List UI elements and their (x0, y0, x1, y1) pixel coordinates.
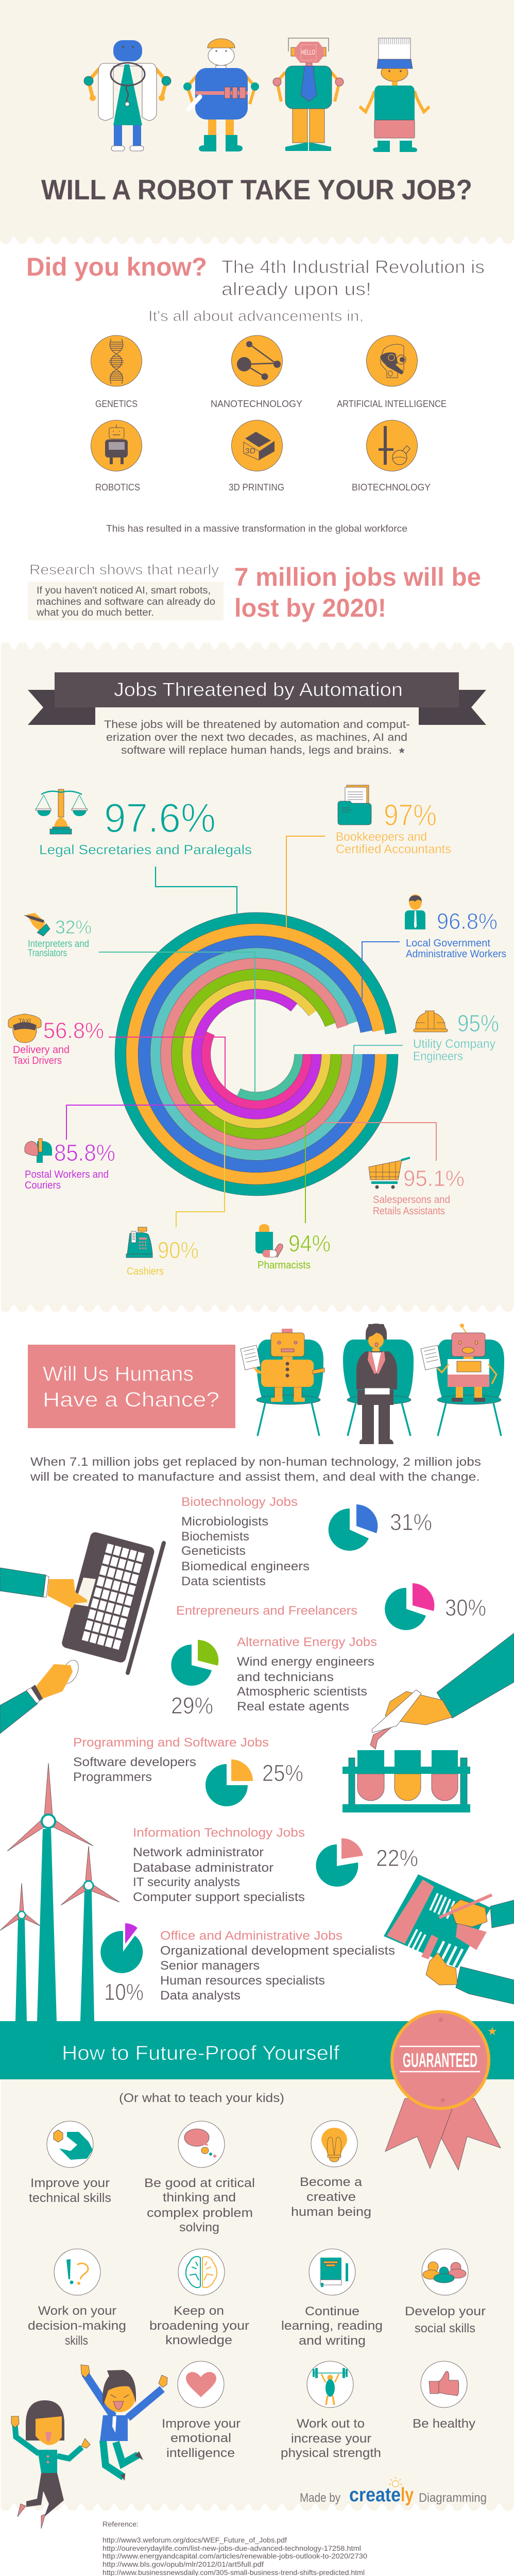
illustration: mouse hand (0, 1657, 82, 1734)
illustration: wind turbines (0, 1763, 119, 2021)
tip: continue learning: learning, reading (281, 2319, 383, 2333)
references: http://oureverydaylife.com/list-new-jobs-due-advanced-technology-17258.html (102, 2544, 361, 2552)
icon: 3D printing (232, 420, 282, 471)
stat: cashiers (127, 1237, 199, 1277)
stat: government (406, 909, 506, 960)
icon: interpreter hand (24, 913, 50, 936)
callout: AI notice: If you haven't noticed AI, smart robots, (37, 585, 211, 596)
stat: postal workers: 85.8% (54, 1140, 115, 1166)
callout: 7 million jobs (234, 563, 481, 622)
stat: pharmacists (258, 1230, 331, 1271)
illustration: doctor robot (84, 40, 171, 151)
callout: 7 million jobs: 7 million jobs will be (234, 563, 481, 591)
job list: information technology: Database administrator (133, 1861, 273, 1875)
badge: guaranteed: ★ (437, 2015, 444, 2025)
job list: office and administrative: Senior managers (160, 1959, 260, 1973)
text block: jobs description (104, 719, 410, 760)
leader line: utility (354, 1045, 403, 1055)
pie chart: 10 percent: 10% (104, 1979, 144, 2005)
tip: physical strength (281, 2361, 381, 2460)
job list: biotechnology: Microbiologists (181, 1515, 268, 1529)
stat: salespersons: Salespersons and (373, 1194, 450, 1206)
stat: bookkeepers (336, 799, 451, 856)
stat: taxi drivers: Taxi Drivers (13, 1055, 62, 1066)
icon: nanotechnology (232, 335, 282, 386)
panel: will us humans have a chance: Have a Chance? (43, 1388, 219, 1411)
chart: concentric ring chart (121, 918, 392, 1190)
pie chart: 22 percent: 22% (376, 1845, 418, 1871)
pie chart: 30 percent (385, 1583, 486, 1630)
illustration: robot interviewer two (421, 1324, 504, 1436)
illustration: robot interviewer one (241, 1329, 324, 1436)
text: workforce transformation: This has resulted in a massive transformation in the global workforce (106, 523, 407, 534)
section background: jobs threatened (1, 642, 514, 1312)
tip: social skills (405, 2249, 486, 2335)
tip: emotional intelligence: emotional (170, 2431, 231, 2445)
tip: broadening knowledge (149, 2249, 249, 2347)
illustration: typing hand (0, 1568, 87, 1608)
tip: emotional intelligence (162, 2361, 241, 2460)
badge: guaranteed: ★ (487, 2025, 498, 2038)
icon: taxi driver (8, 1014, 41, 1043)
job list: programming: Programming and Software Jobs (73, 1736, 269, 1750)
tip: broadening knowledge: knowledge (165, 2333, 232, 2347)
job list: information technology: Network administrator (133, 1845, 264, 1859)
pie chart: 10 percent (100, 1923, 144, 2005)
icon: taxi driver: TAXI (19, 1018, 31, 1024)
text block: 7.1 million jobs (30, 1455, 481, 1483)
stat: bookkeepers: 97% (384, 799, 437, 832)
heading: did you know: Did you know? (26, 252, 207, 281)
pie chart: 31 percent (329, 1504, 432, 1551)
icon: folder (338, 785, 371, 825)
icon: genetics (91, 335, 142, 386)
credit: made by creately: create (349, 2484, 401, 2506)
job list: alternative energy (237, 1635, 377, 1714)
icon: robotics (91, 420, 142, 471)
leader line: pharmacists (305, 1123, 306, 1223)
tip: continue learning (281, 2249, 383, 2348)
stat: government: 96.8% (437, 909, 498, 934)
credit: made by creately: Made by (300, 2491, 340, 2505)
panel: will us humans have a chance: Will Us Humans (43, 1363, 194, 1385)
job list: office and administrative (160, 1929, 395, 2003)
banner: how to future-proof yourself: How to Future-Proof Yourself (62, 2042, 339, 2064)
tip: decision-making: Work on your (38, 2304, 116, 2318)
job list: office and administrative: Organizational development specialists (160, 1944, 395, 1958)
stat: postal workers: Couriers (25, 1180, 61, 1191)
text block: jobs description: erization over the next two decades, as machines, AI and (106, 732, 407, 743)
job list: alternative energy: Alternative Energy Jobs (237, 1635, 377, 1649)
credit: made by creately (300, 2477, 487, 2506)
tip: physical strength: increase your (291, 2432, 371, 2446)
callout: 7 million jobs: lost by 2020! (234, 594, 386, 622)
job list: information technology: Computer support specialists (133, 1890, 305, 1904)
tip: improve technical skills (29, 2121, 111, 2205)
stat: legal secretaries (39, 795, 252, 857)
pie chart: 25 percent: 25% (262, 1760, 303, 1786)
pie chart: 29 percent (171, 1640, 218, 1719)
stat: legal secretaries: Legal Secretaries and Paralegals (39, 842, 252, 857)
stat: government: Administrative Workers (406, 948, 506, 960)
illustration: human candidate (343, 1324, 414, 1444)
text block: 4th industrial revolution (221, 257, 485, 299)
label: robotics: ROBOTICS (95, 482, 140, 493)
tip: physical strength: Work out to (297, 2417, 365, 2431)
banner: jobs threatened by automation: Jobs Threatened by Automation (114, 679, 403, 700)
callout: AI notice (28, 582, 224, 620)
tip: social skills: Develop your (405, 2304, 486, 2318)
job list: office and administrative: Office and Administrative Jobs (160, 1929, 342, 1943)
leader line: legal (156, 867, 237, 913)
label: nanotechnology: NANOTECHNOLOGY (211, 399, 302, 409)
job list: biotechnology: Biochemists (181, 1530, 249, 1544)
job heading: entrepreneurs: Entrepreneurs and Freelancers (176, 1604, 357, 1618)
stat: salespersons: 95.1% (403, 1166, 465, 1191)
tip: critical thinking: complex problem (147, 2206, 253, 2220)
icon: biotechnology (367, 420, 417, 471)
tip: broadening knowledge: Keep on (174, 2304, 224, 2318)
stat: cashiers: Cashiers (127, 1266, 164, 1277)
text: advancements: It's all about advancements in, (148, 308, 364, 325)
stat: bookkeepers: Bookkeepers and (336, 830, 427, 844)
icon: artificial intelligence (367, 335, 417, 386)
illustration: document with hands (384, 1874, 514, 2004)
tip: decision-making: skills (65, 2334, 88, 2348)
stat: interpreters: Interpreters and (28, 939, 89, 950)
stat: pharmacists: Pharmacists (258, 1260, 311, 1271)
stat: postal workers (25, 1140, 115, 1191)
leader line: taxi (109, 1037, 225, 1091)
illustration: businessman robot: HELLO (301, 48, 315, 56)
text block: jobs description: * (399, 745, 405, 760)
job list: information technology (133, 1826, 305, 1904)
illustration: hand with pipette (370, 1633, 514, 1749)
tip: critical thinking: solving (179, 2221, 219, 2234)
callout: AI notice: what you do much better. (36, 607, 154, 618)
stat: utility engineers: Engineers (413, 1049, 463, 1063)
tip: critical thinking (144, 2121, 255, 2234)
leader line: sales (323, 1123, 436, 1161)
badge: guaranteed: ★ (439, 2095, 447, 2105)
leader line: cashiers (176, 1121, 225, 1227)
pie chart: 25 percent (205, 1759, 303, 1806)
tip: critical thinking: Be good at critical (144, 2176, 255, 2190)
tip: emotional intelligence: Improve your (162, 2417, 241, 2431)
tip: decision-making (28, 2249, 126, 2348)
stat: taxi drivers: 56.8% (43, 1018, 104, 1043)
tip: creative human being: creative (306, 2190, 356, 2204)
stat: taxi drivers (13, 1018, 104, 1066)
references: http://www.bls.gov/opub/mlr/2012/01/art5full.pdf (102, 2560, 264, 2568)
icon: shopping cart (369, 1157, 410, 1189)
stat: interpreters (28, 917, 92, 959)
credit: made by creately: Diagramming (419, 2491, 487, 2505)
label: 3D printing: 3D PRINTING (229, 482, 284, 493)
job list: biotechnology: Geneticists (181, 1544, 246, 1558)
pie chart: 30 percent: 30% (445, 1595, 486, 1621)
text block: 4th industrial revolution: already upon us! (221, 279, 371, 299)
pie chart: 29 percent: 29% (171, 1692, 213, 1719)
tip: physical strength: physical strength (281, 2446, 381, 2460)
tip: continue learning: and writing (299, 2334, 366, 2348)
leader line: government (362, 942, 400, 999)
illustration: businessman robot (273, 38, 344, 151)
illustration: celebrating man (81, 2365, 167, 2481)
stat: salespersons: Retails Assistants (373, 1206, 445, 1217)
stat: utility engineers: 95% (457, 1010, 499, 1037)
tip: emotional intelligence: intelligence (166, 2446, 235, 2460)
illustration: laptop keyboard (61, 1531, 164, 1673)
icon: government worker (405, 894, 425, 929)
stat: legal secretaries: 97.6% (104, 795, 216, 841)
tip: broadening knowledge: broadening your (149, 2319, 249, 2333)
tip: decision-making: decision-making (28, 2319, 126, 2333)
job list: biotechnology (181, 1495, 310, 1588)
job list: alternative energy: and technicians (237, 1670, 334, 1684)
text block: jobs description: software will replace human hands, legs and brains. (121, 744, 392, 756)
tip: creative human being: human being (291, 2205, 371, 2219)
stat: bookkeepers: Certified Accountants (336, 842, 451, 856)
icon: scales (36, 789, 88, 834)
text block: 7.1 million jobs: When 7.1 million jobs get replaced by non-human technology, 2 million jobs (30, 1455, 481, 1468)
credit: made by creately: ly (401, 2484, 414, 2506)
text block: 4th industrial revolution: The 4th Industrial Revolution is (221, 257, 485, 277)
stat: cashiers: 90% (158, 1237, 199, 1263)
pie chart: 22 percent (316, 1838, 418, 1887)
callout: AI notice: machines and software can already do (37, 597, 215, 607)
tip: be healthy: Be healthy (413, 2417, 475, 2431)
banner: how to future-proof yourself (0, 2021, 514, 2079)
job list: programming (73, 1736, 269, 1784)
leader line: bookkeepers (286, 836, 325, 927)
references: http://www.energyandcapital.com/articles/renewable-jobs-outlook-to-2020/2730 (102, 2552, 367, 2560)
stat: taxi drivers: Delivery and (13, 1044, 70, 1056)
icon: pharmacy inhaler and pills (255, 1224, 283, 1258)
tip: be healthy (413, 2361, 475, 2431)
text block: jobs description: These jobs will be threatened by automation and comput- (104, 719, 410, 731)
text: research shows: Research shows that nearly (29, 562, 219, 578)
stat: salespersons (373, 1166, 465, 1217)
title: WILL A ROBOT TAKE YOUR JOB? (41, 174, 472, 206)
label: artificial intelligence: ARTIFICIAL INTELLIGENCE (337, 399, 447, 409)
illustration: test tube rack (342, 1750, 470, 1812)
leader line: interpreters (99, 952, 255, 1092)
job list: biotechnology: Biotechnology Jobs (181, 1495, 298, 1509)
tip: social skills: social skills (415, 2321, 475, 2335)
job list: information technology: IT security analysts (133, 1875, 240, 1889)
job list: alternative energy: Wind energy engineers (237, 1655, 374, 1669)
illustration: celebrating woman (11, 2400, 90, 2529)
tip: continue learning: Continue (305, 2304, 359, 2318)
job list: alternative energy: Real estate agents (237, 1700, 349, 1714)
pie chart: 31 percent: 31% (390, 1509, 432, 1535)
icon: 3D printing: 3D (245, 447, 255, 455)
illustration: engineer robot (183, 39, 259, 151)
icon: mailbox (25, 1139, 52, 1163)
job list: biotechnology: Biomedical engineers (181, 1560, 310, 1573)
label: biotechnology: BIOTECHNOLOGY (352, 482, 431, 493)
panel: will us humans have a chance (28, 1345, 235, 1428)
tip: improve technical skills: technical skills (29, 2191, 111, 2205)
banner: jobs threatened by automation (28, 672, 486, 725)
job list: alternative energy: Atmospheric scientists (237, 1685, 367, 1699)
job list: office and administrative: Human resources specialists (160, 1974, 325, 1988)
section background: future proof (1, 2079, 514, 2511)
job list: office and administrative: Data analysts (160, 1989, 241, 2003)
references: http://www3.weforum.org/docs/WEF_Future_of_Jobs.pdf (102, 2536, 287, 2544)
stat: interpreters: 32% (55, 917, 92, 938)
stat: utility engineers: Utility Company (413, 1037, 495, 1051)
references (102, 2520, 367, 2576)
text block: 7.1 million jobs: will be created to manufacture and assist them, and deal with the change. (30, 1470, 480, 1483)
tip: improve technical skills: Improve your (30, 2176, 110, 2190)
leader line: postal (66, 1105, 216, 1140)
stat: utility engineers (413, 1010, 499, 1063)
tip: creative human being (291, 2121, 371, 2219)
stat: postal workers: Postal Workers and (25, 1169, 109, 1180)
tip: critical thinking: thinking and (163, 2191, 236, 2205)
illustration: chef robot (359, 38, 430, 152)
section background: header (0, 0, 514, 244)
stat: government: Local Government (406, 938, 490, 949)
job list: programming: Software developers (73, 1755, 196, 1769)
stat: interpreters: Translators (28, 948, 67, 959)
text: or what to teach your kids: (Or what to teach your kids) (119, 2091, 284, 2105)
job list: information technology: Information Technology Jobs (133, 1826, 305, 1840)
stat: pharmacists: 94% (288, 1230, 331, 1257)
icon: hard hat (414, 1011, 448, 1032)
job list: programming: Programmers (73, 1770, 152, 1784)
label: genetics: GENETICS (95, 399, 138, 409)
tip: creative human being: Become a (300, 2175, 363, 2189)
references: Reference: (102, 2520, 139, 2528)
icon: cash register (126, 1227, 152, 1258)
job list: biotechnology: Data scientists (181, 1574, 266, 1588)
badge: guaranteed (385, 2011, 501, 2170)
